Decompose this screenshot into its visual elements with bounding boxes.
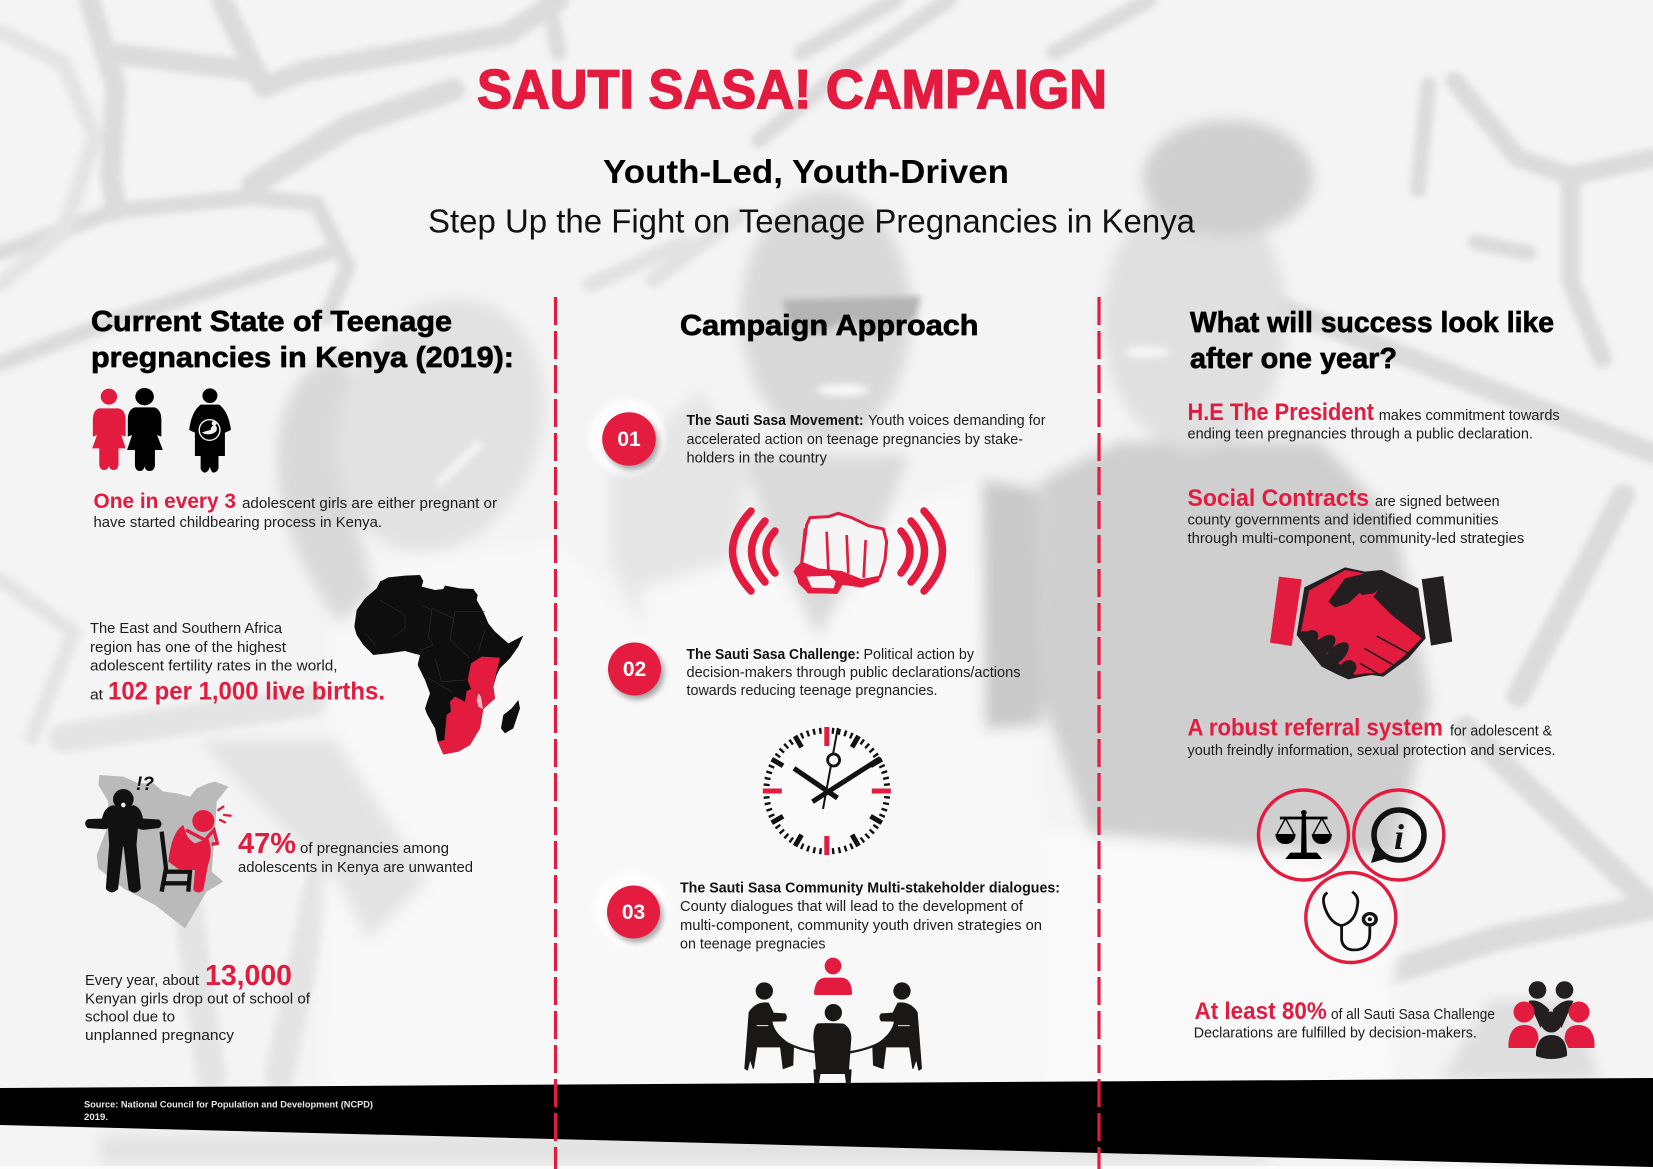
icon: people meeting around a table [745,958,921,1083]
stat: 13,000: school due to [85,1010,175,1026]
stat: 13,000: Kenyan girls drop out of school of [85,992,311,1008]
text: social contracts: through multi-component, community-led strategies [1188,531,1524,547]
text: the Sauti Sasa movement: accelerated action on teenage pregnancies by stake- [686,432,1023,448]
title: SAUTI SASA! CAMPAIGN [477,58,1107,120]
text: the Sauti Sasa challenge: towards reducing teenage pregnancies. [686,683,938,699]
stat: one in every 3: have started childbearing process in Kenya. [94,515,382,531]
text: referral system [1188,714,1556,759]
text: social contracts: are signed between [1375,494,1500,510]
black footer band [0,1078,1653,1167]
icon: handshake [1270,567,1452,681]
text: the Sauti Sasa movement: Youth voices demanding for [868,413,1046,429]
stat: 47 percent: of pregnancies among [300,841,449,857]
heading: success [1190,307,1554,375]
source note: Source: National Council for Population and Development (NCPD) [84,1100,373,1110]
stat: 47 percent: adolescents in Kenya are unwanted [238,860,473,876]
badge 01: 01 [617,428,641,451]
text: at least 80 percent: of all Sauti Sasa Challenge [1331,1007,1495,1023]
badge 03: 03 [622,901,645,924]
text: community multi-stakeholder dialogues: on teenage pregnacies [680,936,826,952]
badge 02: 02 [623,658,646,681]
heading: success: What will success look like [1190,307,1554,339]
heading: current state [91,306,514,374]
left woman [320,540,730,1090]
source note [84,1100,373,1122]
text: at least 80 percent: At least 80% [1194,998,1327,1025]
text: community multi-stakeholder dialogues [680,880,1060,952]
heading: success: after one year? [1190,343,1397,375]
text: community multi-stakeholder dialogues: multi-component, community youth driven strategies on [680,918,1042,934]
stat: one in every 3: One in every 3 [94,489,236,513]
text: H.E The President: ending teen pregnancies through a public declaration. [1188,426,1533,442]
map: Africa with East and Southern region highlighted [354,575,523,754]
column divider right [1097,297,1101,1169]
icon: group of people [1508,981,1594,1059]
heading: campaign approach: Campaign Approach [680,310,978,342]
stat: fertility rate [90,621,385,706]
panel: campaign approach [589,310,1060,1083]
stat: fertility rate: region has one of the highest [90,640,286,656]
text: the Sauti Sasa movement: holders in the country [686,450,828,466]
source note: 2019. [84,1112,108,1122]
text: at least 80 percent [1194,998,1495,1042]
text: community multi-stakeholder dialogues: County dialogues that will lead to the development of [680,899,1024,915]
text: referral system: A robust referral system [1188,714,1443,742]
badge 01 [589,399,665,475]
stat: one in every 3: adolescent girls are either pregnant or [242,496,497,512]
column divider left [554,297,557,1169]
stat: 13,000 [85,960,311,1044]
stat: 13,000: Every year, about [85,973,199,989]
icon: stethoscope [1306,872,1396,962]
text: community multi-stakeholder dialogues: The Sauti Sasa Community Multi-stakeholder dialogues: [680,880,1060,896]
stat: 13,000: unplanned pregnancy [85,1028,235,1044]
stat: 47 percent [238,828,473,876]
badge 02 [608,642,661,696]
centre person [610,390,750,640]
subtitle: Youth-Led, Youth-Driven [603,153,1009,190]
icon: two girls and pregnant girl [92,388,231,473]
text: H.E The President [1188,399,1560,442]
icon: raised fist with sound waves [732,511,942,593]
text: social contracts [1188,485,1524,547]
stat: fertility rate: at [90,688,103,704]
icon: scales of justice [1258,790,1348,880]
panel: success after one year [1188,307,1594,1059]
heading: current state: Current State of Teenage [91,306,452,338]
stat: fertility rate: adolescent fertility rates in the world, [90,658,338,674]
stat: one in every 3 [94,489,497,531]
stat: 47 percent: 47% [238,828,296,860]
tagline: Step Up the Fight on Teenage Pregnancies in Kenya [428,202,1196,240]
icon: clock [763,727,891,855]
stat: fertility rate: 102 per 1,000 live births. [108,678,385,706]
text: social contracts: county governments and identified communities [1188,512,1498,528]
text: the Sauti Sasa challenge: Political action by [864,647,975,663]
icon: Kenya map with worried man and crying girl [87,774,231,928]
panel: current state [85,306,523,1044]
stat: 13,000: 13,000 [205,960,292,992]
text: H.E The President: makes commitment towards [1379,408,1560,424]
text: referral system: youth freindly information, sexual protection and services. [1188,743,1556,759]
text: the Sauti Sasa challenge: decision-makers through public declarations/actions [686,665,1020,681]
icon: information bubble: i [1394,817,1404,857]
text: H.E The President: H.E The President [1188,399,1374,426]
icon: information bubble [1354,790,1444,880]
text: at least 80 percent: Declarations are fulfilled by decision-makers. [1194,1026,1477,1042]
text: the Sauti Sasa challenge [686,647,1020,699]
text: social contracts: Social Contracts [1188,485,1369,512]
right woman [1042,442,1430,860]
badge 03 [594,872,670,948]
text: the Sauti Sasa movement: The Sauti Sasa Movement: [686,413,864,429]
heading: current state: pregnancies in Kenya (2019): [91,342,514,374]
stat: fertility rate: The East and Southern Africa [90,621,283,637]
text: the Sauti Sasa challenge: The Sauti Sasa Challenge: [686,647,860,663]
icon: Kenya map with worried man and crying girl: !? [136,774,154,795]
text: the Sauti Sasa movement [686,413,1046,466]
text: referral system: for adolescent & [1450,724,1552,740]
